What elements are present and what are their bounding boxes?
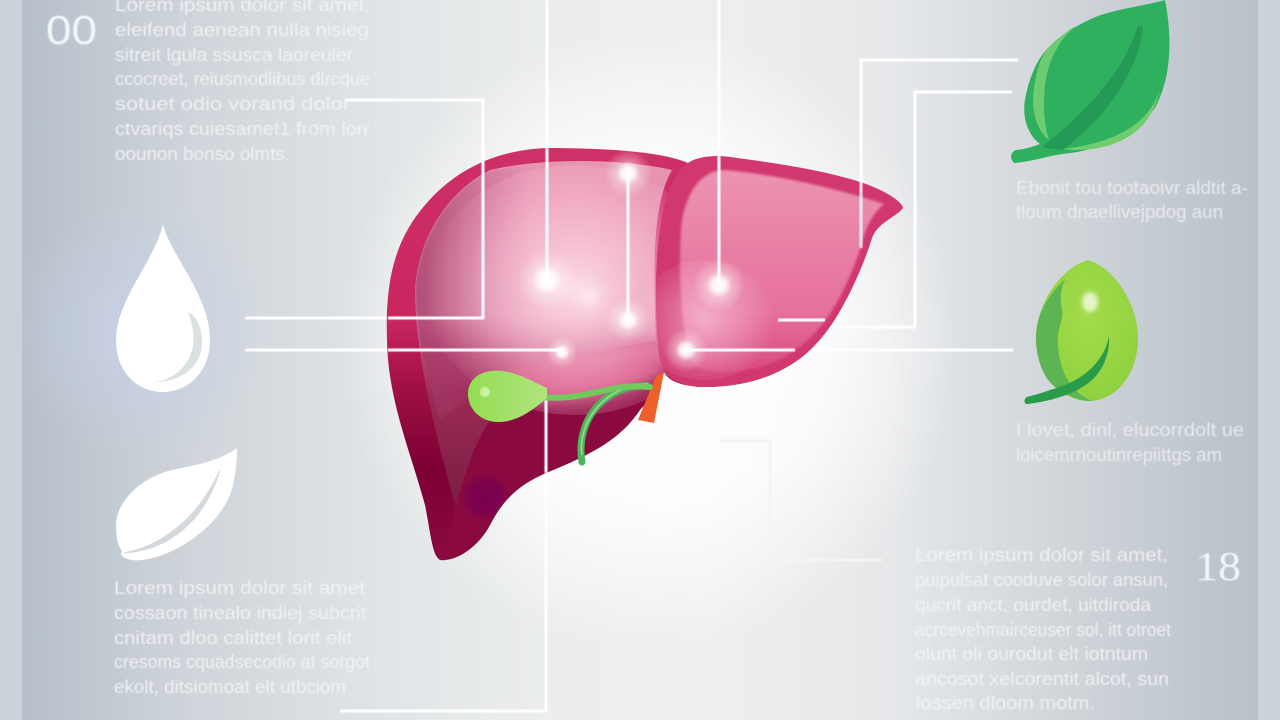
text block: bottom left: cossaon tinealo indiej subcrit [114,603,366,623]
icon: water drop [116,224,210,392]
icon: white leaf [116,448,237,560]
text block: bottom left: cresoms cquadsecodio at sorgot [114,652,370,672]
left panel shading [414,167,516,418]
gallbladder and ducts [468,371,664,462]
leaf shaded band [1036,278,1092,401]
leaf stem [1024,336,1109,404]
glow nodes [517,149,745,372]
text block: lime leaf caption: loicemrnoutinrepiittgs am [1016,445,1222,465]
text block: bottom right [915,545,1171,713]
right lobe inner panel [680,170,884,372]
leaf midrib [1046,28,1141,148]
number 00: 00 [46,7,97,53]
text block: bottom right: ancosot xelcorentit alcot, sun [915,669,1169,689]
cystic duct [540,386,650,398]
icon: dark green leaf [1011,0,1169,163]
text block: bottom left: cnitam dloo calittet lorit elit [114,628,352,648]
text block: bottom right: olunt oli ourodut elt iotntum [915,644,1148,664]
text block: bottom right: acrcevehmairceuser sol, itt otroet [915,620,1171,640]
right lobe [656,156,903,387]
orange duct [638,372,664,423]
text block: bottom left: Lorem ipsum dolor sit amet [114,578,365,598]
text block: bottom left: ekolt, ditsiomoat elt utbciom [114,677,346,697]
branch duct [581,386,648,462]
number 18: 18 [1195,543,1241,589]
text block: top left [115,0,370,164]
text block: top left: ctvariqs cuiesamet1 from lorr [115,119,370,139]
text block: lime leaf caption [1016,420,1244,465]
text block: bottom right: fossen dloom motm. [915,693,1095,713]
connector lines behind the liver [245,0,1018,711]
lower liver dark area [458,372,662,526]
text block: dark leaf caption [1016,178,1248,222]
left lobe inner panel [415,161,672,508]
purple bruise spot [466,477,506,518]
light leaf edges [1033,26,1076,140]
text block: top left: ccocreet, reiusmodlibus dlrcque [115,69,370,89]
text block: top left: sotuet odio vorand dolor [115,94,350,114]
text block: dark leaf caption: Ebonit tou tootaoivr aldtit a- [1016,178,1248,198]
text block: top left: sitreit lgula ssusca laoreuler [115,45,353,65]
liver body [387,148,903,560]
text block: top left: oounon bonso olmts. [115,144,290,164]
text block: top left: eleifend aenean nulla nisieg [115,20,369,40]
lines over the liver [388,148,861,473]
text block: dark leaf caption: tloum dnaellivejpdog aun [1016,202,1223,222]
leaf highlight [1082,292,1098,312]
liver illustration [387,148,903,560]
text block: bottom left [114,578,370,697]
soft central glow [436,165,677,415]
text block: bottom right: Lorem ipsum dolor sit amet, [915,545,1168,565]
text block: bottom right: puipulsat cooduve solor ansun, [915,570,1168,590]
text block: lime leaf caption: I lovet, dinl, elucorrdolt ue [1016,420,1244,440]
gallbladder sac [468,371,547,422]
text block: bottom right: qucrit anct, ourdet, uitdiroda [915,595,1152,615]
icon: lime green leaf [1024,260,1138,404]
